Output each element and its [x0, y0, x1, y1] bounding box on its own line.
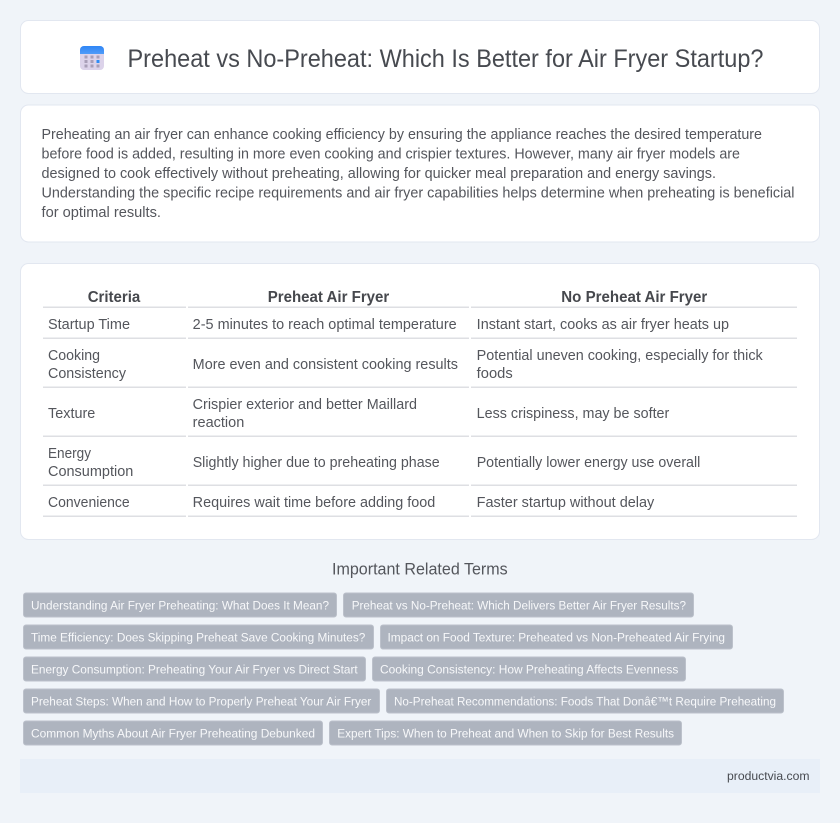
- table row: startup time: Startup Time: [48, 317, 130, 333]
- panel: header: [20, 20, 820, 94]
- table row: energy consumption: Slightly higher due to preheating phase: [193, 455, 440, 471]
- table header row: [88, 289, 707, 306]
- table header row: No Preheat Air Fryer: [561, 289, 707, 306]
- text block: introduction paragraph: before food is added, resulting in more even cooking and crispier textures. However, many air fryer models are: [42, 146, 740, 162]
- tag: Energy Consumption: Preheating Your Air Fryer vs Direct Start: [31, 662, 358, 676]
- table row: cooking consistency: Cooking: [48, 348, 100, 364]
- table row: texture: Crispier exterior and better Maillard: [193, 397, 417, 413]
- tag: Impact on Food Texture: Preheated vs Non-Preheated Air Frying: [388, 630, 725, 644]
- table row: startup time: 2-5 minutes to reach optimal temperature: [193, 317, 457, 333]
- tag: [24, 657, 366, 681]
- tag: Time Efficiency: Does Skipping Preheat Save Cooking Minutes?: [31, 630, 365, 644]
- tag: [24, 689, 380, 713]
- tag: Cooking Consistency: How Preheating Affects Evenness: [380, 662, 678, 676]
- table header row: Criteria: [88, 289, 140, 306]
- text block: introduction paragraph: for optimal results.: [42, 205, 161, 221]
- table row: cooking consistency: Consistency: [48, 366, 127, 382]
- tag: Understanding Air Fryer Preheating: What Does It Mean?: [31, 598, 329, 612]
- table row: convenience: Requires wait time before adding food: [193, 495, 435, 511]
- tag: No-Preheat Recommendations: Foods That Donâ€™t Require Preheating: [394, 694, 776, 708]
- table row: cooking consistency: Potential uneven cooking, especially for thick: [477, 348, 764, 364]
- text block: introduction paragraph: [42, 127, 794, 221]
- text block: introduction paragraph: Understanding the specific recipe requirements and air fryer capabilities helps determine when preheating is beneficial: [42, 186, 794, 202]
- tag: [372, 657, 686, 681]
- tags: related terms: [24, 593, 784, 745]
- tag: Common Myths About Air Fryer Preheating Debunked: [31, 726, 315, 740]
- tag: [344, 593, 694, 617]
- table row: convenience: Convenience: [48, 495, 130, 511]
- tag: [24, 625, 374, 649]
- table row: cooking consistency: foods: [477, 366, 513, 382]
- title: Preheat vs No-Preheat: Which Is Better for Air Fryer Startup?: [128, 45, 764, 73]
- table row: convenience: Faster startup without delay: [477, 495, 655, 511]
- footer: [20, 759, 820, 793]
- tag: Expert Tips: When to Preheat and When to Skip for Best Results: [337, 726, 674, 740]
- text block: introduction paragraph: designed to cook effectively without preheating, allowing for quicker meal preparation and energy savings.: [42, 166, 716, 182]
- icon: calendar: [80, 46, 104, 70]
- table row: energy consumption: Consumption: [48, 464, 133, 480]
- table row: cooking consistency: [48, 348, 764, 382]
- tag: Preheat Steps: When and How to Properly Preheat Your Air Fryer: [31, 694, 371, 708]
- table row: energy consumption: Energy: [48, 446, 92, 462]
- panel: comparison table: [20, 264, 820, 540]
- heading: important related terms: Important Related Terms: [332, 560, 508, 578]
- tag: [330, 721, 682, 745]
- tag: Preheat vs No-Preheat: Which Delivers Better Air Fryer Results?: [352, 598, 686, 612]
- table row: texture: Texture: [48, 406, 95, 422]
- table row: energy consumption: Potentially lower energy use overall: [477, 455, 700, 471]
- tag: [380, 625, 732, 649]
- table row: startup time: Instant start, cooks as air fryer heats up: [477, 317, 729, 333]
- footer: productvia.com: [727, 769, 810, 783]
- table row: texture: reaction: [193, 415, 244, 431]
- table row: energy consumption: [48, 446, 700, 480]
- tag: [24, 593, 336, 617]
- table row: texture: Less crispiness, may be softer: [477, 406, 670, 422]
- tag: [24, 721, 322, 745]
- table row: convenience: [48, 495, 655, 511]
- panel: introduction: [20, 105, 820, 242]
- table row: startup time: [48, 317, 729, 333]
- table header row: Preheat Air Fryer: [268, 289, 389, 306]
- tag: [386, 689, 784, 713]
- table row: texture: [48, 397, 670, 431]
- text block: introduction paragraph: Preheating an air fryer can enhance cooking efficiency by ensuring the appliance reaches the desired temperature: [42, 127, 762, 143]
- table row: cooking consistency: More even and consistent cooking results: [193, 357, 458, 373]
